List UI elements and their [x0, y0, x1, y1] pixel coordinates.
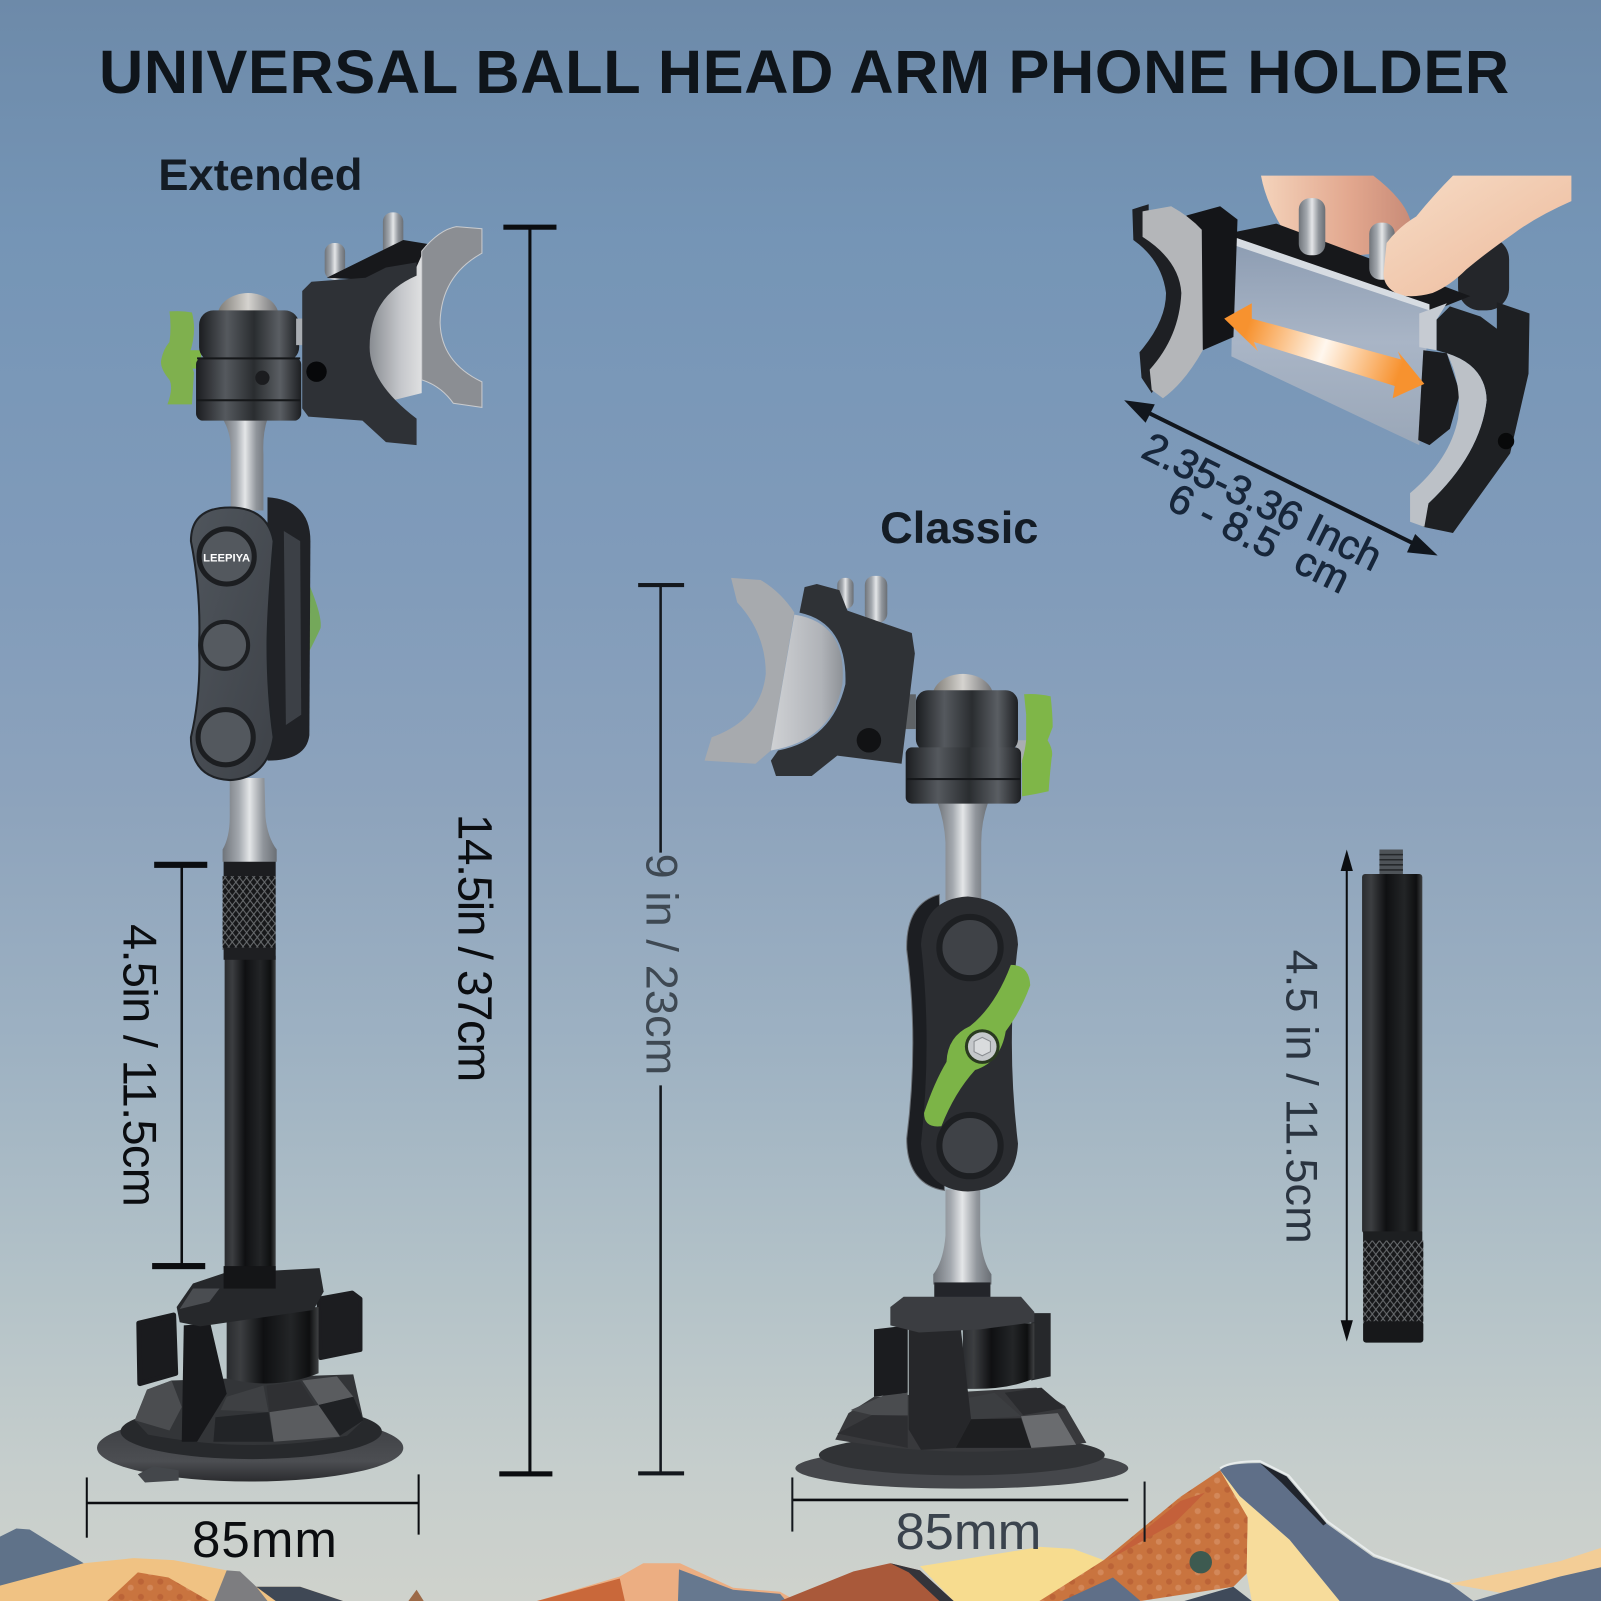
extended: suction base	[97, 1266, 403, 1483]
dimension: extension rod length: 4.5 in / 11.5cm	[1277, 950, 1328, 1244]
clamp detail: left jaw dark back	[1132, 204, 1184, 393]
title: UNIVERSAL BALL HEAD ARM PHONE HOLDER	[99, 38, 1509, 106]
heading: Extended: Extended	[158, 149, 362, 200]
extended: clamp rail	[327, 240, 434, 280]
classic: clamp pins	[837, 576, 887, 623]
extended: upper steel stem	[223, 419, 268, 511]
extended: arm front plate	[191, 507, 274, 780]
dimension: classic height: 9 in / 23cm	[636, 854, 687, 1075]
extended: clamp jaw	[302, 262, 417, 445]
classic: arm back plate	[907, 894, 944, 1191]
classic: clamp jaw	[771, 584, 915, 776]
clamp detail: rear finger	[1261, 176, 1410, 255]
clamp detail: jaw hole	[1498, 433, 1514, 449]
clamp detail: thumb	[1384, 176, 1571, 296]
clamp detail: width label cm: 6 - 8.5 cm	[1161, 474, 1357, 602]
extended: green knob back	[301, 567, 321, 666]
extended: green wing knob	[161, 311, 201, 404]
classic: green wing knob	[1016, 694, 1053, 796]
clamp detail: right jaw slot	[1418, 350, 1460, 445]
heading: Classic: Classic	[880, 502, 1038, 553]
dimension: extended height	[447, 225, 556, 1476]
clamp detail: width arrow	[1124, 400, 1438, 555]
classic: arm front plate	[921, 896, 1018, 1192]
clamp detail: orange double arrow	[1224, 303, 1424, 398]
classic: suction base	[795, 1297, 1128, 1489]
classic: ball head	[904, 674, 1021, 804]
dimension: rod section	[114, 862, 207, 1269]
phone clamp detail with hand	[1124, 176, 1571, 602]
extended: arm back plate	[268, 497, 310, 761]
clamp detail: left jaw block	[1186, 206, 1238, 350]
extension rod	[1362, 850, 1423, 1343]
extended: clamp silver plate	[368, 255, 422, 400]
clamp detail: right jaw silver corner	[1419, 303, 1447, 350]
classic: clamp silver plate	[771, 615, 843, 750]
extended: bottom knob	[198, 710, 253, 765]
clamp detail: top rail	[1231, 224, 1470, 312]
classic: lower steel stem	[933, 1190, 991, 1284]
dimension: classic height	[636, 583, 687, 1475]
classic: green lever	[924, 965, 1030, 1126]
clamp detail: rear knob	[1458, 237, 1509, 310]
classic: bottom knob	[939, 1115, 1001, 1176]
dimension: extended height: 14.5in / 37cm	[447, 814, 500, 1082]
classic: gray grip	[705, 578, 794, 764]
dimension: extended base width: 85mm	[192, 1511, 337, 1568]
extended: middle knob	[201, 622, 248, 669]
dimension: classic base width: 85mm	[895, 1503, 1041, 1560]
clamp detail: pins	[1299, 198, 1395, 280]
classic: top knob	[939, 917, 1001, 978]
mountains	[0, 1461, 1601, 1601]
extended: gray grip	[422, 227, 482, 407]
classic: clamp hole	[857, 728, 881, 753]
extended: rod and knurled collar	[223, 860, 276, 1288]
classic phone holder assembly	[705, 576, 1128, 1489]
clamp detail: width label inch: 2.35-3.36 Inch	[1135, 423, 1389, 580]
dimension: rod section: 4.5in / 11.5cm	[114, 924, 167, 1207]
extended: lower steel stem	[223, 778, 277, 862]
extended: clamp hole	[306, 361, 327, 382]
extended: top knob with brand	[199, 529, 254, 584]
extended: ball head	[196, 293, 304, 421]
clamp detail: silver body	[1231, 239, 1429, 445]
clamp detail: right jaw block	[1423, 302, 1530, 533]
dimension: extension rod length	[1277, 850, 1353, 1342]
extended phone holder assembly	[97, 212, 482, 1483]
clamp detail: left gray grip	[1143, 206, 1203, 398]
extended: top knob with brand: LEEPIYA	[203, 553, 250, 565]
classic: upper steel stem	[937, 802, 988, 901]
clamp detail: right jaw silver edge	[1410, 353, 1487, 527]
extended: clamp pins	[325, 212, 403, 280]
